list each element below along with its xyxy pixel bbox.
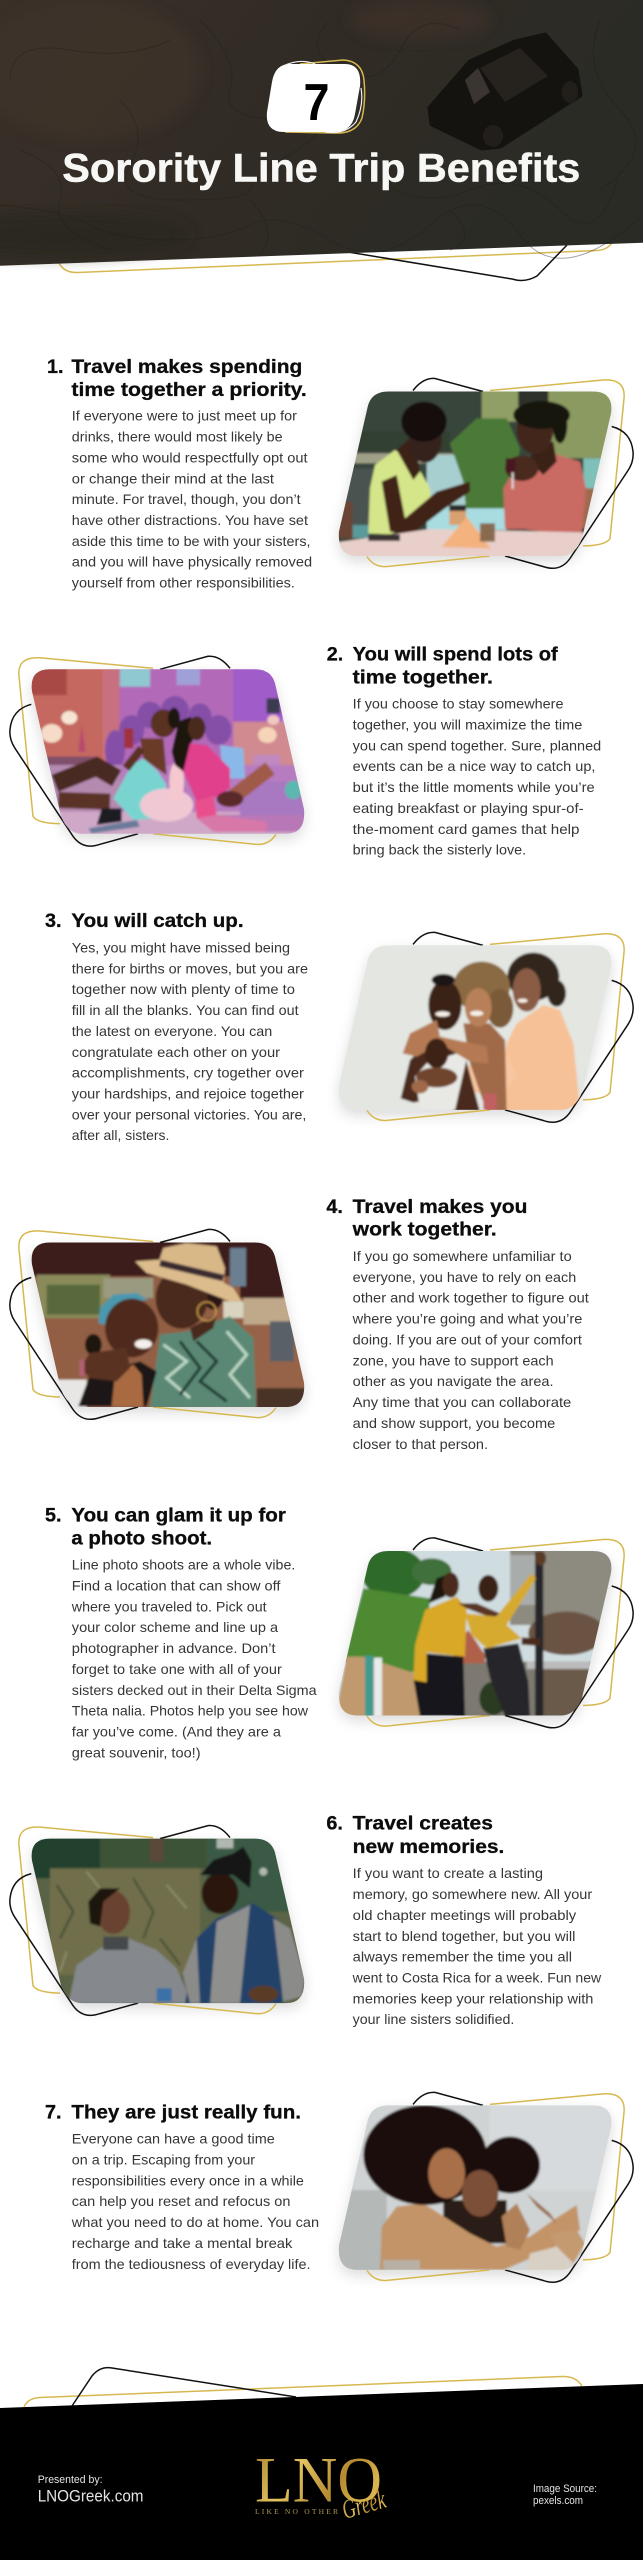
body text 6: If you want to create a lasting [353,1865,543,1881]
panel: benefit 7 [45,2092,633,2282]
presented by credit [38,2474,144,2506]
body text 3: Yes, you might have missed being [72,940,290,956]
body text 5: where you traveled to. Pick out [71,1598,267,1614]
heading 6: 6. [326,1813,343,1835]
body text 2: If you choose to stay somewhere [353,696,564,712]
body text 2: eating breakfast or playing spur-of- [353,800,584,816]
body text 6: start to blend together, but you will [353,1928,575,1944]
body text 3: after all, sisters. [72,1127,169,1143]
body text 4: other and work together to figure out [353,1290,589,1306]
heading 1: 1. [47,356,64,378]
heading 7: 7. [45,2102,62,2124]
footer accent lines [24,2368,582,2407]
body text 4 [352,1248,589,1452]
body text 7: responsibilities every once in a while [72,2172,304,2188]
body text 1: If everyone were to just meet up for [72,408,297,424]
photo 6: two hikers in the forest [10,1826,310,2015]
body text 2: you can spend together. Sure, planned [353,737,601,753]
body text 1: some who would respectfully opt out [72,449,308,465]
body text 4: and show support, you become [353,1415,556,1431]
number badge [267,60,365,133]
body text 7: what you need to do at home. You can [71,2214,319,2230]
body text 2: events can be a nice way to catch up, [353,758,596,774]
LNO Greek logo: Greek [338,2484,390,2525]
header gold and black accent lines [59,243,612,280]
panel: benefit 2 [10,643,601,858]
heading 1 [47,356,307,401]
heading 6: new memories. [353,1836,504,1858]
panel: benefit 3 [45,910,633,1143]
photo 5: two women in yellow sweaters [330,1538,633,1728]
body text 7: recharge and take a mental break [72,2235,293,2251]
body text 4: everyone, you have to rely on each [353,1269,576,1285]
body text 3: the latest on everyone. You can [72,1023,272,1039]
body text 4: Any time that you can collaborate [353,1394,572,1410]
heading 2: time together. [353,667,493,689]
icon: toy car on map [430,35,580,148]
body text 5: sisters decked out in their Delta Sigma [72,1682,317,1698]
body text 5: Theta nalia. Photos help you see how [72,1703,309,1719]
heading 5: a photo shoot. [71,1528,212,1550]
body text 5: great souvenir, too!) [72,1744,201,1760]
heading 5 [45,1504,286,1550]
heading 5: 5. [45,1504,62,1526]
number badge: 7 [304,74,330,132]
photo 3: three women hugging [330,932,633,1122]
body text 1: minute. For travel, though, you don’t [72,491,301,507]
title: Sorority Line Trip Benefits [62,147,580,191]
body text 6: your line sisters solidified. [353,2011,514,2027]
body text 3: together now with plenty of time to [72,981,295,997]
body text 7: from the tediousness of everyday life. [72,2256,310,2272]
body text 3: fill in all the blanks. You can find out [72,1002,299,1018]
body text 3: over your personal victories. You are, [72,1106,306,1122]
heading 6 [326,1813,504,1858]
photo 7: two women embracing [330,2092,633,2282]
body text 5: photographer in advance. Don’t [72,1640,276,1656]
body text 2 [353,696,601,858]
LNO Greek logo: LNO [255,2445,382,2517]
panel: benefit 1 [47,356,633,591]
heading 1: time together a priority. [71,379,307,401]
body text 4: doing. If you are out of your comfort [353,1331,582,1347]
body text 5: far you’ve come. (And they are a [72,1724,281,1740]
body text 6: old chapter meetings will probably [353,1907,576,1923]
heading 4: work together. [352,1219,497,1241]
photo 1: two women at a table [330,378,633,568]
body text 5: Find a location that can show off [72,1578,281,1594]
photo 2: two friends in a neon room [10,656,307,846]
body text 3 [72,940,308,1143]
body text 2: together, you will maximize the time [353,716,583,732]
photo 4: woman in hat hugging friend [10,1229,310,1419]
body text 1: and you will have physically removed [72,554,312,570]
body text 5: forget to take one with all of your [72,1661,282,1677]
body text 5 [71,1557,317,1760]
body text 1: drinks, there would most likely be [72,429,283,445]
body text 5: your color scheme and line up a [72,1619,278,1635]
image source credit: pexels.com [533,2495,583,2507]
body text 1: yourself from other responsibilities. [72,575,295,591]
body text 4: If you go somewhere unfamiliar to [353,1248,572,1264]
body text 4: zone, you have to support each [353,1352,554,1368]
body text 3: congratulate each other on your [72,1044,280,1060]
heading 2: You will spend lots of [353,643,558,665]
body text 4: closer to that person. [353,1436,488,1452]
body text 6: went to Costa Rica for a week. Fun new [352,1970,602,1986]
body text 1: aside this time to be with your sisters, [72,533,310,549]
body text 2: but it’s the little moments while you’re [353,779,595,795]
body text 2: the-moment card games that help [353,821,580,837]
presented by credit: LNOGreek.com [38,2488,144,2506]
heading 2 [327,643,558,689]
body text 3: there for births or moves, but you are [72,960,308,976]
body text 7: can help you reset and refocus on [72,2193,290,2209]
footer background [0,2384,643,2560]
body text 1 [72,408,312,591]
heading 7: They are just really fun. [71,2102,301,2124]
image source credit: Image Source: [533,2483,597,2495]
heading 3: 3. [45,910,62,932]
heading 6: Travel creates [353,1813,493,1835]
body text 4: where you’re going and what you’re [352,1311,583,1327]
body text 6: memory, go somewhere new. All your [353,1886,593,1902]
body text 2: bring back the sisterly love. [353,842,526,858]
body text 7: Everyone can have a good time [72,2131,275,2147]
heading 2: 2. [327,643,343,665]
heading 4: Travel makes you [353,1196,527,1218]
panel: header [0,0,643,280]
body text 7: on a trip. Escaping from your [72,2152,255,2168]
panel: benefit 4 [10,1196,589,1452]
body text 3: your hardships, and rejoice together [72,1086,304,1102]
image source credit [533,2483,597,2507]
heading 4: 4. [326,1196,343,1218]
panel: benefit 5 [45,1504,633,1760]
LNO Greek logo: LIKE NO OTHER [255,2507,338,2516]
heading 3: You will catch up. [71,910,244,932]
heading 4 [326,1196,527,1241]
panel: footer [0,2368,643,2560]
body text 1: have other distractions. You have set [72,512,308,528]
body text 3: accomplishments, cry together over [72,1065,304,1081]
panel: benefit 6 [10,1813,602,2027]
map photo background [0,0,643,266]
heading 1: Travel makes spending [71,356,302,378]
body text 1: or change their mind at the last [72,470,274,486]
body text 5: Line photo shoots are a whole vibe. [72,1557,295,1573]
heading 5: You can glam it up for [71,1504,286,1526]
body text 6: memories keep your relationship with [353,1990,593,2006]
body text 6: always remember the time you all [353,1949,572,1965]
body text 6 [352,1865,602,2027]
presented by credit: Presented by: [38,2474,103,2486]
body text 4: other as you navigate the area. [353,1373,554,1389]
body text 7 [71,2131,319,2272]
